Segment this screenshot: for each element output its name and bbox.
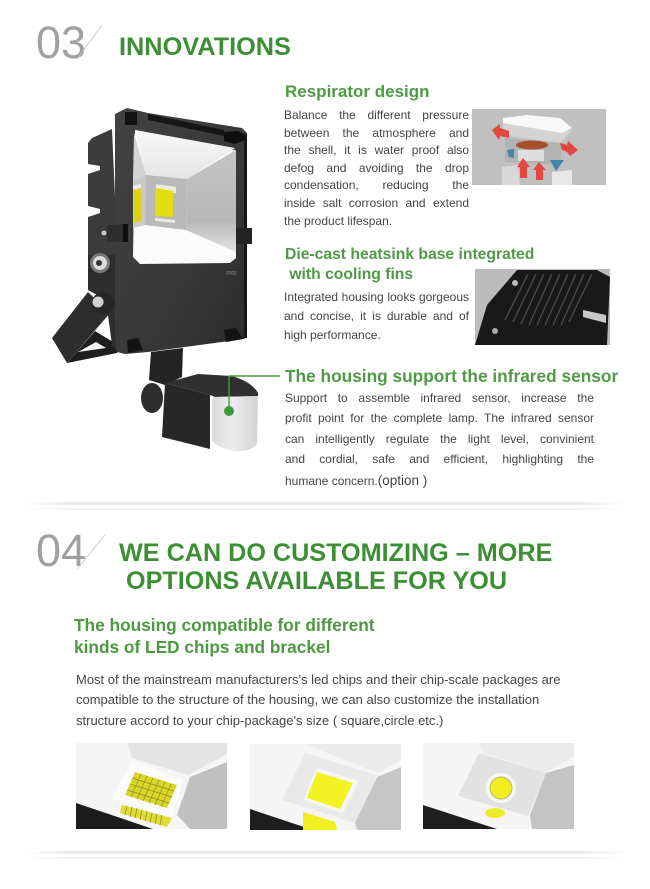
- respirator text: condensation, reducing the: [284, 178, 469, 192]
- heatsink heading: with cooling fins: [289, 266, 413, 283]
- sensor callout line: [224, 376, 280, 416]
- IP label: IP65: [226, 271, 237, 277]
- sensor lens: [212, 396, 258, 451]
- chip photo 1: [76, 743, 227, 829]
- sensor text: profit point for the complete lamp. The infrared sensor: [285, 411, 594, 425]
- respirator text: the shell, it is water proof also: [284, 143, 469, 157]
- divider 04: [25, 851, 625, 859]
- section 04 title: [119, 539, 552, 595]
- sensor heading: The housing support the infrared sensor: [285, 366, 618, 386]
- neck: [149, 348, 183, 385]
- sensor text: and cordial, safe and efficient, highlighting the: [285, 452, 594, 466]
- heatsink text: [284, 290, 469, 342]
- right black edge: [244, 134, 247, 338]
- glass: [133, 130, 236, 264]
- heatsink text: high performance.: [284, 328, 381, 342]
- bracket lower brace: [67, 331, 118, 363]
- customizing subheading: kinds of LED chips and brackel: [74, 637, 330, 657]
- bottom corners: [127, 338, 143, 353]
- respirator photo: [472, 109, 606, 185]
- customizing subheading: The housing compatible for different: [74, 615, 375, 635]
- frame corners: [125, 112, 137, 125]
- heatsink heading: Die-cast heatsink base integrated: [285, 246, 534, 263]
- main body: [115, 108, 247, 354]
- customizing text: structure accord to your chip-package's size ( square,circle etc.): [76, 713, 443, 728]
- heatsink text: Integrated housing looks gorgeous: [284, 290, 469, 304]
- respirator text: the product lifespan.: [284, 214, 392, 228]
- sensor text: can intelligently regulate the light level, convinient: [285, 432, 594, 446]
- customizing text: [76, 672, 560, 728]
- sensor text: Support to assemble infrared sensor, increase the: [285, 391, 594, 405]
- chip photo 3: [423, 743, 574, 829]
- respirator heading: Respirator design: [285, 82, 430, 101]
- heatsink photo: [475, 269, 610, 345]
- bracket arm: [52, 292, 110, 363]
- respirator text: [284, 108, 469, 228]
- section 04 number: 04: [36, 525, 86, 576]
- side strip: [88, 255, 118, 353]
- sensor housing: [165, 374, 258, 397]
- customizing text: Most of the mainstream manufacturers's led chips and their chip-scale packages are: [76, 672, 560, 687]
- side tabs: [236, 228, 252, 244]
- knob: [141, 383, 163, 413]
- sensor text: [285, 391, 594, 488]
- glands: [90, 253, 110, 273]
- top rail: [148, 114, 224, 136]
- section 03 title: INNOVATIONS: [119, 33, 291, 61]
- chip plate: [145, 175, 187, 230]
- section 04 title: WE CAN DO CUSTOMIZING – MORE: [119, 539, 552, 567]
- respirator text: between the atmosphere and: [284, 126, 469, 140]
- sensor text: humane concern.(option ): [285, 473, 427, 488]
- respirator text: Balance the different pressure: [284, 108, 469, 122]
- section 04 title: OPTIONS AVAILABLE FOR YOU: [126, 567, 507, 595]
- respirator text: defog and avoiding the drop: [284, 161, 469, 175]
- chip photo 2: [250, 744, 401, 830]
- heatsink text: and concise, it is durable and of: [284, 309, 469, 323]
- customizing text: compatible to the structure of the housing, we can also customize the installation: [76, 692, 539, 707]
- back fins: [88, 129, 118, 265]
- heatsink heading: [285, 246, 534, 283]
- respirator text: inside salt corrosion and extend: [284, 196, 469, 210]
- customizing subheading: [74, 615, 375, 657]
- divider 03: [25, 502, 625, 510]
- section 03 number: 03: [36, 17, 86, 68]
